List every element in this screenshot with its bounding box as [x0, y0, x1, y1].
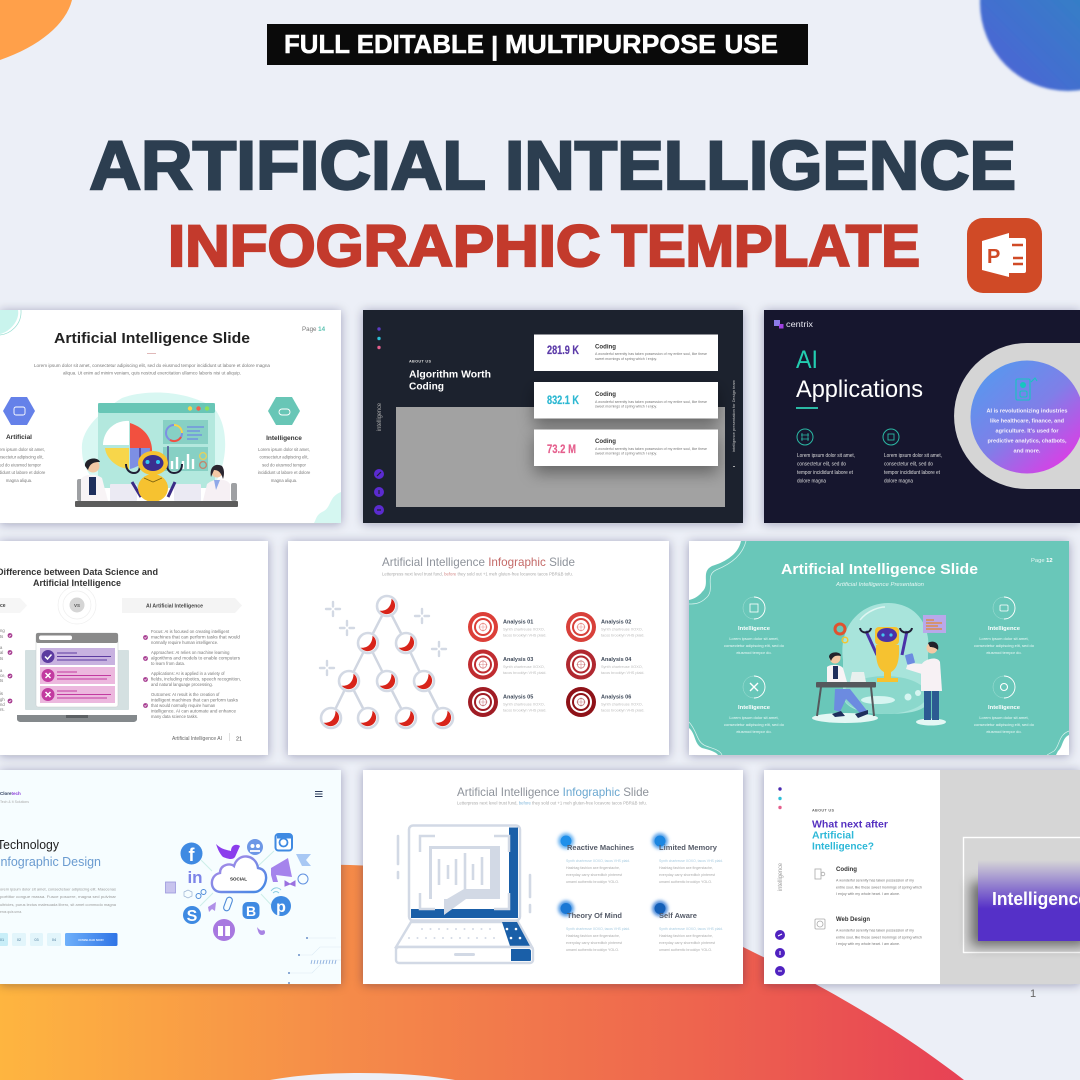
item: Reactive Machines: Hashtag fashion axe fingerstache, [566, 866, 620, 870]
illustration: robot in glass dome [812, 603, 946, 726]
numbered pagination: 03 [34, 938, 39, 942]
subtitle: Infographic Template [168, 214, 920, 279]
icon: paper plane [208, 902, 216, 912]
vertical label: intelligence [377, 402, 383, 431]
card: 73.2 M: 73.2 M [547, 444, 576, 456]
icon: facebook: f [188, 845, 196, 865]
card: 832.1 K: A wonderful serenity has taken possession of my entire soul, like these [595, 400, 707, 404]
analysis 03 [468, 650, 546, 680]
title: Artificial Intelligence: ARTIFICIAL [90, 127, 486, 204]
feature: bottom left [724, 676, 785, 734]
feature: bottom right: Lorem ipsum dolor sit amet, [979, 715, 1029, 720]
background shape: orange corner blob [0, 0, 72, 60]
icon: paper clip [223, 896, 233, 912]
feature: top right: eiusmod tempor do. [986, 650, 1022, 655]
icon: gift [213, 919, 235, 941]
icon: phone robot [1016, 378, 1037, 400]
icon: butterfly [285, 881, 295, 886]
card: 281.9 K: sweet mornings of spring which I enjoy. [595, 357, 657, 361]
item: Limited Memory: Hashtag fashion axe fingerstache, [659, 866, 713, 870]
left pill: ce [0, 603, 6, 609]
left bullet list: rs. [0, 707, 5, 712]
numbered pagination: 01 [0, 938, 4, 942]
heading: Algorithm Worth [409, 370, 491, 380]
item: Coding [815, 867, 922, 896]
numbered pagination [0, 933, 61, 946]
card: 281.9 K: Coding [595, 344, 616, 350]
screen graphic [398, 836, 530, 915]
heading [0, 567, 158, 589]
analysis 02: Analysis 02 [601, 620, 631, 626]
robot [860, 627, 912, 682]
feature: bottom right: Intelligence [988, 705, 1021, 711]
numbered pagination: 04 [52, 938, 56, 942]
icon: skype [183, 906, 201, 925]
VS badge: VS [74, 603, 80, 608]
illustration: laptop checklist [17, 633, 137, 722]
panel: slide 8 AI laptop infographic [363, 770, 743, 984]
VS badge [58, 586, 96, 624]
download button: DOWNLOAD NOW! [78, 938, 104, 942]
feature: top left: consectetur adipiscing elit, sed do [724, 643, 785, 648]
right bullet list: intelligence. AI can automate and enhance [151, 708, 237, 714]
panel: slide 7 technology infographic design [0, 770, 341, 984]
analysis 04 [566, 650, 644, 680]
item: Coding: A wonderful serenity has taken possession of my [836, 878, 914, 882]
feature: bottom left: Intelligence [738, 705, 771, 711]
feature: Artificial: Artificial [6, 434, 32, 441]
subtitle: Infographic Template: TEMPLATE [612, 214, 920, 279]
icon: gears [196, 890, 206, 898]
item: Theory Of Mind: Hashtag fashion axe fingerstache, [566, 934, 620, 938]
dashboard panel [923, 615, 946, 633]
item: Reactive Machines: everyday carry shoreditch pinterest [566, 873, 622, 877]
analysis 01: Analysis 01 [503, 620, 533, 626]
feature 1: dolore magna [797, 478, 826, 484]
item: Self Aware: umami authentic brooklyn YOLO. [659, 948, 712, 952]
feature 2: tempor incididunt labore et [884, 470, 941, 476]
social icons [374, 469, 384, 515]
analysis 02: Synth chartreuse XOXO, [601, 628, 643, 632]
item: Web Design: A wonderful serenity has taken possession of my [836, 928, 914, 932]
icon: box [166, 882, 176, 893]
heading: Difference between Data Science and [0, 567, 158, 578]
item: Limited Memory [652, 833, 723, 884]
analysis 05 [468, 687, 546, 717]
analysis 01: tacos brooklyn VHS plaid. [503, 634, 546, 638]
gears [835, 624, 848, 643]
analysis 06: Synth chartreuse XOXO, [601, 702, 643, 706]
callout text: and more. [1014, 448, 1041, 454]
icon: facebook [180, 842, 202, 865]
numbered pagination: 02 [17, 938, 21, 942]
keyboard dots [408, 928, 495, 939]
item: Web Design [815, 917, 922, 946]
left bullet list: is [0, 691, 3, 696]
left bullet list [0, 628, 12, 712]
background shape: blue corner circle [980, 0, 1080, 91]
analysis 03: Synth chartreuse XOXO, [503, 665, 545, 669]
card: 73.2 M: A wonderful serenity has taken possession of my entire soul, like these [595, 447, 707, 451]
right bullet list: that would normally require human [151, 703, 216, 708]
feature: top left: Lorem ipsum dolor sit amet, [729, 636, 779, 641]
feature: Intelligence: consectetur adipiscing elit, [259, 454, 309, 460]
download button [65, 933, 118, 946]
feature: top left: eiusmod tempor do. [736, 650, 772, 655]
item: Coding: I enjoy with my whole heart. I am alone. [836, 892, 900, 896]
panel: slide 5 tree infographic [288, 541, 669, 755]
background shape: bottom gradient wave [0, 864, 964, 1080]
heading: Artificial Intelligence [33, 578, 121, 589]
icon: menu [315, 792, 322, 796]
subtitle: Infographic Template: INFOGRAPHIC [168, 214, 600, 279]
analysis 04: tacos brooklyn VHS plaid. [601, 671, 644, 675]
card: 832.1 K [534, 382, 718, 418]
analysis 03: tacos brooklyn VHS plaid. [503, 671, 546, 675]
right bullet list [143, 629, 241, 719]
feature: Artificial: magna aliqua. [6, 478, 32, 483]
item: Reactive Machines [558, 833, 634, 884]
panel: slide 4 data science vs AI [0, 541, 268, 755]
standing doctor [905, 642, 946, 726]
right bullet list: fields, including robotics, speech recognition, [151, 676, 241, 682]
item: Web Design: I enjoy with my whole heart. I am alone. [836, 942, 900, 946]
heading: Artificial [812, 830, 854, 842]
illustration: robot dashboard [75, 393, 238, 507]
heading: Artificial Intelligence Infographic Slide [382, 555, 575, 569]
icon: group [247, 839, 263, 855]
analysis 05: tacos brooklyn VHS plaid. [503, 708, 546, 712]
feature 2 [883, 429, 942, 484]
right pill [122, 598, 242, 613]
heading: Artificial Intelligence Infographic Slide [457, 785, 649, 799]
icon: PowerPoint logo: P [987, 246, 1000, 268]
callout text: like healthcare, finance, and [990, 418, 1064, 424]
left bullet list: ng [0, 628, 5, 633]
eyebrow: ABOUT US [409, 360, 431, 364]
right bullet list: Outcomes: AI result is the creation of [151, 692, 220, 697]
callout text: agriculture. It's used for [996, 428, 1058, 434]
card: 73.2 M [534, 430, 718, 466]
scientist left [77, 459, 108, 501]
feature: Intelligence: Intelligence [266, 435, 302, 442]
decorative dots [377, 327, 381, 349]
card: 832.1 K: 832.1 K [547, 395, 580, 407]
image frame with Intelligence banner [964, 838, 1080, 952]
panel: slide 9 what next after AI [764, 770, 1080, 984]
illustration: social cloud [166, 834, 311, 941]
icon: megaphone [271, 858, 292, 882]
icon: wifi [271, 888, 281, 893]
footer [172, 733, 242, 742]
left bullet list: ts [0, 634, 3, 639]
page label: Page 12 [1031, 558, 1053, 564]
icon: PowerPoint logo [967, 218, 1042, 293]
icon: teal hexagon [268, 397, 300, 425]
analysis 02 [566, 612, 644, 642]
feature: bottom left: consectetur adipiscing elit, sed do [724, 722, 785, 727]
item: Self Aware [652, 900, 723, 952]
icon: flag [296, 854, 311, 866]
icon: pinterest [271, 896, 291, 916]
feature 1 [797, 429, 855, 484]
gradient circle callout [970, 360, 1080, 474]
item: Web Design: entire soul, like these sweet mornings of spring which [836, 936, 922, 940]
icon: blue hexagon [3, 397, 35, 425]
item: Coding: Coding [836, 867, 857, 873]
card: 73.2 M: Coding [595, 438, 616, 445]
heading: Artificial Intelligence Slide [781, 561, 978, 578]
social icons [775, 930, 785, 976]
desk [75, 501, 238, 507]
feature 2: consectetur elit, sed do [884, 462, 933, 468]
feature: Intelligence [258, 435, 311, 483]
feature: bottom left: eiusmod tempor do. [736, 729, 772, 734]
heading [0, 837, 101, 869]
icon: instagram [276, 834, 292, 850]
item: Theory Of Mind: umami authentic brooklyn YOLO. [566, 948, 619, 952]
card: 832.1 K: sweet mornings of spring which I enjoy. [595, 404, 657, 408]
illustration: laptop [396, 826, 533, 963]
feature: bottom right [974, 676, 1035, 734]
analysis 06: Analysis 06 [601, 694, 631, 700]
right bullet list: to learn from data. [151, 661, 185, 666]
feature: top left [724, 597, 785, 655]
item: Reactive Machines: Synth chartreuse XOXO, tacos VHS plaid. [566, 859, 630, 863]
left pill [0, 598, 27, 613]
feature: top right: Intelligence [988, 626, 1021, 632]
card: 281.9 K: A wonderful serenity has taken possession of my entire soul, like these [595, 352, 707, 356]
analysis 01 [468, 612, 546, 642]
body text: eros quis urna. [0, 910, 22, 914]
logo: centrix: centrix [786, 319, 814, 329]
heading: Infographic Design [0, 854, 101, 869]
heading: Artificial Intelligence Slide [54, 330, 250, 347]
intro text: Lorem ipsum dolor sit amet, consectetur adipiscing elit, sed do eiusmod tempor incididunt ut labore et dolore magna [34, 363, 271, 368]
feature: Intelligence: Lorem ipsum dolor sit amet, [258, 447, 310, 452]
heading: Intelligence? [812, 840, 874, 852]
footer: 21 [236, 736, 242, 742]
body text: orem ipsum dolor sit amet, consectetuer adipiscing elit. Maecenas [0, 888, 116, 892]
icon: cube [184, 890, 192, 898]
heading [409, 370, 491, 392]
right bullet list: many data science tasks. [151, 714, 198, 719]
tree diagram [320, 596, 453, 728]
icon: blogger: B [246, 903, 256, 919]
feature: top right [974, 597, 1035, 655]
card: 832.1 K: Coding [595, 391, 616, 398]
card: 73.2 M: sweet mornings of spring which I enjoy. [595, 452, 657, 456]
left bullet list: a [0, 645, 3, 650]
item: Web Design: Web Design [836, 917, 870, 923]
subheading: Artificial Intelligence Presentation [835, 582, 924, 588]
feature: Intelligence: sed do eiusmod tempor [262, 462, 306, 468]
item: Limited Memory: Limited Memory [659, 845, 717, 852]
logo: Cloretech [0, 791, 21, 796]
subheading: Letterpress next level trust fund, before they sold out +1 meh gluten-free locavore tacos PBR&B tofu. [457, 800, 647, 806]
item: Reactive Machines: umami authentic brooklyn YOLO. [566, 880, 619, 884]
cloud: SOCIAL [230, 876, 247, 882]
banner: USE [724, 29, 778, 59]
item: Limited Memory: everyday carry shoreditch pinterest [659, 873, 715, 877]
intro text [34, 363, 271, 376]
icon: linkedin: in [187, 868, 203, 887]
image placeholder [396, 407, 725, 507]
analysis 05: Analysis 05 [503, 694, 533, 700]
feature 1: consectetur elit, sed do [797, 462, 846, 468]
feature: top left: Intelligence [738, 626, 771, 632]
feature: Intelligence: magna aliqua. [271, 478, 297, 483]
item: Limited Memory: umami authentic brooklyn YOLO. [659, 880, 712, 884]
grey capsule [954, 343, 1080, 489]
icon: blogger [242, 902, 260, 919]
panel: slide 3 AI applications [764, 310, 1080, 523]
right bullet list: machines that can perform tasks that would [151, 634, 241, 640]
analysis 03: Analysis 03 [503, 657, 533, 663]
analysis 04: Synth chartreuse XOXO, [601, 665, 643, 669]
card: 281.9 K: 281.9 K [547, 345, 580, 357]
analysis 06: tacos brooklyn VHS plaid. [601, 708, 644, 712]
left bullet list: ts [0, 678, 3, 683]
item: Theory Of Mind [558, 900, 630, 952]
subheading: Letterpress next level trust fund, before they sold out +1 meh gluten-free locavore tacos PBR&B tofu. [382, 572, 573, 576]
feature: top right: consectetur adipiscing elit, sed do [974, 643, 1035, 648]
footer: Artificial Intelligence AI [172, 736, 222, 742]
feature: Intelligence: incididunt ut labore et dolore [258, 470, 311, 475]
feature: bottom left: Lorem ipsum dolor sit amet, [729, 715, 779, 720]
icon: small bird [257, 927, 265, 935]
feature: bottom right: eiusmod tempor do. [986, 729, 1022, 734]
logo: Tech & It Solutions [0, 800, 29, 804]
feature: top right: Lorem ipsum dolor sit amet, [979, 636, 1029, 641]
item: Self Aware: everyday carry shoreditch pinterest [659, 941, 715, 945]
item: Limited Memory: Synth chartreuse XOXO, tacos VHS plaid. [659, 859, 723, 863]
feature: bottom right: consectetur adipiscing elit, sed do [974, 722, 1035, 727]
right bullet list: algorithms and models to enable computers [151, 656, 240, 660]
seated man [812, 652, 878, 723]
laptops [110, 484, 201, 501]
keypad dots [506, 928, 521, 939]
right bullet list: intelligent machines that can perform tasks [151, 698, 238, 702]
feature 1: tempor incididunt labore et [797, 470, 854, 476]
left bullet list: ts [0, 656, 3, 661]
feature 2: dolore magna [884, 478, 913, 484]
right bullet list: Applications: AI is applied in a variety of [151, 671, 225, 676]
desk [816, 682, 876, 716]
feature: Artificial [0, 434, 46, 483]
card: 281.9 K [534, 334, 718, 371]
vertical label: intelligence [778, 862, 784, 891]
item: Theory Of Mind: everyday carry shoreditch pinterest [566, 941, 622, 945]
banner: FULL EDITABLE [284, 29, 484, 59]
right bullet list: Focus: AI is focused on creating intelligent [151, 629, 230, 634]
panel: slide 1 AI robot with scientists [0, 310, 341, 523]
heading: AI: AI [796, 346, 818, 374]
callout text: AI is revolutionizing industries [986, 408, 1068, 414]
circuit decoration [288, 937, 341, 984]
body text: ultricies, purus lectus malesuada libero, sit amet commodo magna [0, 903, 117, 907]
banner: | [491, 31, 498, 61]
item: Reactive Machines: Reactive Machines [567, 845, 634, 852]
callout text [986, 408, 1068, 454]
decorative dots [778, 787, 782, 809]
feature 2: Lorem ipsum dolor sit amet, [884, 453, 942, 459]
right pill: AI Artificial Intelligence [146, 604, 203, 610]
panel: slide 2 algorithm worth coding [363, 310, 743, 523]
item: Theory Of Mind: Synth chartreuse XOXO, tacos VHS plaid. [566, 927, 630, 931]
analysis 04: Analysis 04 [601, 657, 632, 663]
item: Self Aware: Hashtag fashion axe fingerstache, [659, 934, 713, 938]
item: Theory Of Mind: Theory Of Mind [567, 913, 622, 920]
heading [812, 818, 888, 852]
icon: skype: S [187, 908, 198, 925]
page label: Page 14 [302, 326, 326, 333]
heading: Applications: Applications [796, 376, 923, 403]
intro text: aliqua. Ut enim ad minim veniam, quis nostrud exercitation ullamco laboris nisi ut aliquip. [63, 370, 241, 376]
logo: centrix [774, 319, 814, 329]
right bullet list: normally require human intelligence. [151, 640, 218, 645]
item: Self Aware: Self Aware [659, 913, 697, 920]
right bullet list: and natural language processing. [151, 682, 213, 687]
analysis 01: Synth chartreuse XOXO, [503, 628, 545, 632]
icon: pinterest: p [276, 899, 286, 916]
cloud [212, 856, 266, 892]
icon: twitter [216, 844, 240, 859]
logo [0, 791, 29, 804]
heading: What next after [812, 818, 888, 830]
body text [0, 888, 117, 914]
icon: dribbble [298, 874, 308, 884]
left bullet list: al [0, 650, 3, 655]
item: Coding: entire soul, like these sweet mornings of spring which [836, 886, 922, 890]
analysis 05: Synth chartreuse XOXO, [503, 702, 545, 706]
feature 1: Lorem ipsum dolor sit amet, [797, 453, 855, 459]
vertical footer: intelligence presentation for Design team [732, 380, 736, 452]
title: Artificial Intelligence: INTELLIGENCE [505, 127, 1016, 204]
analysis 02: tacos brooklyn VHS plaid. [601, 634, 644, 638]
body text: porttitor congue massa. Fusce posuere, magna sed pulvinar [0, 895, 117, 899]
heading: Coding [409, 382, 444, 392]
scientist right [203, 465, 237, 501]
analysis 06 [566, 687, 644, 717]
left bullet list: ce, [0, 673, 6, 678]
banner [267, 24, 808, 65]
right bullet list: Approaches: AI relies on machine learning [151, 650, 230, 655]
item: Self Aware: Synth chartreuse XOXO, tacos VHS plaid. [659, 927, 723, 931]
left bullet list: gh [0, 697, 5, 702]
robot [126, 446, 182, 502]
title: Artificial Intelligence [90, 127, 1016, 204]
panel: slide 6 teal AI slide [689, 541, 1069, 755]
banner: MULTIPURPOSE [505, 29, 716, 59]
callout text: predictive analytics, chatbots, [988, 438, 1067, 444]
eyebrow: ABOUT US [812, 808, 834, 812]
page number: 1 [1030, 988, 1036, 1000]
left bullet list: a [0, 668, 3, 673]
left bullet list: nd [0, 702, 5, 707]
